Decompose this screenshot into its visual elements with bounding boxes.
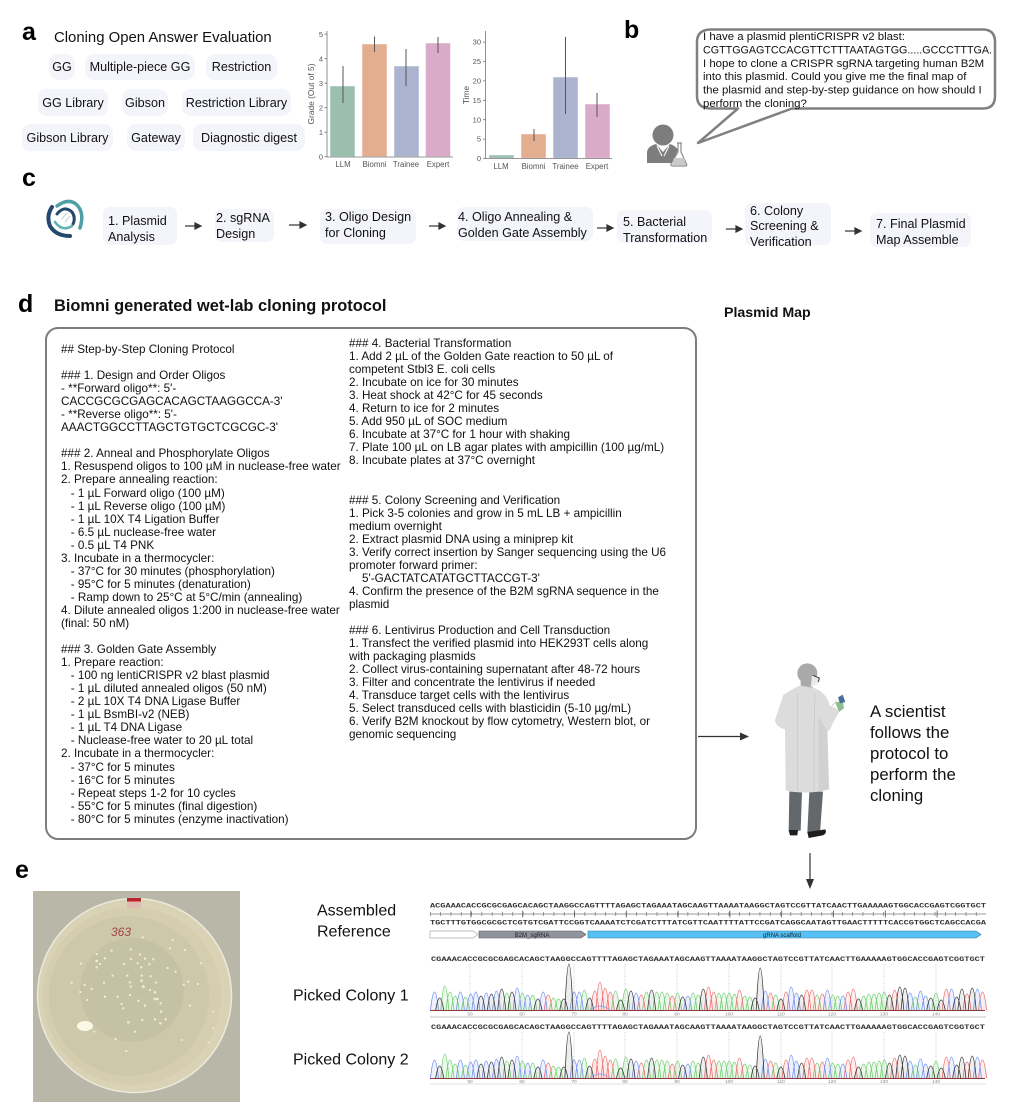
panel label a: a [22, 18, 36, 46]
y ticks: grade: 3 [319, 79, 323, 88]
chromatogram: colony 2: 80 [622, 1079, 628, 1085]
chromatogram: colony 1: 100 [725, 1012, 733, 1018]
chromatogram: colony 2: CGAAACACCGCGCGAGCACAGCTAAGGCCAGTTTTAGAGCTAGAAATAGCAAGTTAAAATAAGGCTAGTCCGTTATCAACTTGAAAAAGTGGCACCGAGTCGGTGCT [431, 1024, 985, 1031]
glasses [813, 675, 819, 682]
chromatogram: colony 1: 120 [828, 1012, 836, 1018]
heading: protocol title: Biomni generated wet-lab cloning protocol [54, 297, 386, 315]
axes: time [483, 31, 612, 158]
chromatogram: colony 2: 130 [880, 1079, 888, 1085]
tag diagnostic digest: Diagnostic digest [201, 130, 297, 144]
face mask [811, 675, 819, 687]
y ticks: grade: 4 [319, 54, 323, 64]
chromatogram: colony 2: 100 [725, 1079, 733, 1085]
y ticks: time [473, 38, 481, 163]
panel d: protocol box [45, 327, 697, 840]
assembled reference track [430, 902, 986, 939]
chromatogram: colony 1: 110 [777, 1012, 785, 1018]
icon: biomni logo [48, 201, 82, 236]
panel label c: c [22, 164, 36, 192]
y ticks: time: 25 [473, 57, 481, 66]
assembled reference track: B2M_sgRNA [515, 933, 549, 939]
y ticks: time: 20 [473, 76, 481, 86]
chromatogram: colony 2: 140 [932, 1079, 940, 1085]
tag GG library: GG Library [42, 96, 104, 110]
chromatogram: colony 2 [430, 1024, 986, 1085]
head [797, 663, 817, 683]
tag Gibson [122, 89, 168, 116]
panel a: cloning task categories [22, 30, 305, 151]
chromatogram: colony 1 [430, 956, 986, 1018]
tag restriction library [182, 89, 291, 116]
bubble outline [697, 30, 995, 143]
red mark [127, 898, 141, 902]
glare [77, 1021, 93, 1031]
labels: sequencing rows: Picked Colony 2 [293, 1052, 409, 1068]
bars: grade [330, 43, 450, 157]
bubble text: the plasmid and step-by-step guidance on how should I [703, 84, 982, 96]
dish rim [38, 898, 232, 1092]
chromatogram: colony 1: 60 [519, 1012, 525, 1018]
tag restriction [206, 54, 277, 80]
glove [835, 701, 844, 712]
speech bubble [697, 30, 995, 143]
lab coat [775, 685, 839, 793]
step 7: 7. Final Plasmid Map Assemble [876, 217, 966, 247]
arrow: scientist to sequencing [806, 853, 814, 889]
arrows: workflow [185, 222, 861, 234]
tag Gibson: Gibson [125, 96, 165, 110]
x labels: time [493, 162, 609, 171]
chart: time by group [461, 31, 612, 171]
panel label b: b [624, 16, 639, 44]
bubble text: I hope to clone a CRISPR sgRNA targeting human B2M [703, 58, 984, 70]
top strand: ACGAAACACCGCGCGAGCACAGCTAAGGCCAGTTTTAGAGCTAGAAATAGCAAGTTAAAATAAGGCTAGTCCGTTATCAACTTGAAAAAGTGGCACCGAGTCGGTGCT [430, 902, 986, 910]
handwritten label: 363 [111, 925, 131, 939]
bars: time [489, 77, 610, 158]
illustration: scientist [775, 663, 845, 838]
tag multiple-piece GG [85, 54, 195, 80]
y ticks: grade: 0 [319, 152, 323, 162]
tag GG [49, 54, 75, 80]
icon: researcher with flask [647, 124, 687, 166]
chromatogram: colony 2: 50 [467, 1079, 473, 1085]
labels: sequencing rows: Reference [317, 924, 391, 940]
chromatogram: colony 2: 70 [571, 1079, 577, 1085]
labels: sequencing rows: Picked Colony 1 [293, 988, 409, 1004]
y ticks: time: 5 [477, 135, 481, 144]
bubble text: into this plasmid. Could you give me the final map of [703, 71, 967, 83]
x labels: grade: Expert [427, 160, 450, 169]
step 2: 2. sgRNA Design [216, 211, 270, 241]
colonies [70, 936, 214, 1052]
tag Gateway: Gateway [131, 130, 181, 144]
chromatogram: colony 1: 80 [622, 1012, 628, 1018]
y axis title: grade: Grade (Out of 5) [306, 63, 316, 124]
x labels: grade [335, 160, 450, 169]
error bars: grade [343, 36, 438, 103]
trousers [789, 792, 823, 833]
chromatogram: colony 1: 90 [674, 1012, 680, 1018]
step 6: 6. Colony Screening & Verification [750, 204, 819, 249]
tag Gibson library [22, 124, 113, 151]
bubble text: CGTTGGAGTCCACGTTCTTTAATAGTGG.....GCCCTTTGA. [703, 44, 992, 56]
panel label d: d [18, 290, 33, 318]
chromatogram: colony 1: 70 [571, 1012, 577, 1018]
y ticks: time: 15 [473, 96, 481, 105]
step 4: 4. Oligo Annealing & Golden Gate Assembly [458, 210, 587, 240]
x labels: time: Biomni [522, 162, 546, 171]
shoes [789, 829, 826, 838]
x labels: grade: Biomni [363, 160, 387, 169]
annotation arrow: gRNA scaffold [588, 931, 981, 938]
x labels: time: LLM [493, 162, 509, 171]
protocol column 2: ### 4. Bacterial Transformation 1. Add 2 µL of the Golden Gate reaction to 50 µL of competent Stbl3 E. coli cells 2. Incubate on ice for 30 minutes 3. Heat shock at 42°C for 45 seconds 4. Return to ice for 2 minutes 5. Add 950 µL of SOC medium 6. Incubate at 37°C for 1 hour with shaking 7. Plate 100 µL on LB agar plates with ampicillin (100 µg/mL) 8. Incubate plates at 37°C overnight ### 5. Colony Screening and Verification 1. Pick 3-5 colonies and grow in 5 mL LB + ampicillin medium overnight 2. Extract plasmid DNA using a miniprep kit 3. Verify correct insertion by Sanger sequencing using the U6 promoter forward primer: 5'-GACTATCATATGCTTACCGT-3' 4. Confirm the presence of the B2M sgRNA sequence in the plasmid ### 6. Lentivirus Production and Cell Transduction 1. Transfect the verified plasmid into HEK293T cells along with packaging plasmids 2. Collect virus-containing supernatant after 48-72 hours 3. Filter and concentrate the lentivirus if needed 4. Transduce target cells with the lentivirus 5. Select transduced cells with blasticidin (5-10 µg/mL) 6. Verify B2M knockout by flow cytometry, Western blot, or genomic sequencing [349, 337, 666, 741]
chromatogram: colony 1: 130 [880, 1012, 888, 1018]
tag restriction library: Restriction Library [186, 96, 287, 110]
tag multiple-piece GG: Multiple-piece GG [90, 60, 190, 74]
chromatogram: colony 1: 50 [467, 1012, 473, 1018]
chromatogram: colony 1: CGAAACACCGCGCGAGCACAGCTAAGGCCAGTTTTAGAGCTAGAAATAGCAAGTTAAAATAAGGCTAGTCCGTTATCAACTTGAAAAAGTGGCACCGAGTCGGTGCT [431, 956, 985, 963]
y ticks: grade [319, 30, 323, 162]
ruler [430, 913, 986, 915]
text: scientist follows protocol: A scientist follows the protocol to perform the cloning [870, 702, 956, 805]
y ticks: time: 0 [477, 154, 481, 163]
annotation arrow: vector [430, 931, 478, 938]
tag diagnostic digest [193, 124, 305, 151]
tag Gateway [127, 124, 185, 151]
chart: grade by group [306, 30, 453, 169]
heading: cloning open answer evaluation: Cloning Open Answer Evaluation [54, 30, 272, 46]
x labels: time: Expert [586, 162, 609, 171]
arrow: protocol to scientist [698, 732, 749, 740]
labels: sequencing rows: Assembled [317, 902, 396, 920]
bottle [838, 695, 845, 703]
chromatogram: colony 2: 90 [674, 1079, 680, 1085]
chromatogram: colony 2: 120 [828, 1079, 836, 1085]
x labels: time: Trainee [552, 162, 579, 171]
pipette [830, 701, 837, 708]
bubble text: perform the cloning? [703, 98, 807, 110]
annotation arrow: B2M sgRNA [479, 931, 586, 938]
x labels: grade: Trainee [393, 160, 419, 169]
labels: sequencing rows [293, 902, 409, 1068]
y ticks: grade: 1 [319, 128, 323, 137]
chromatogram: colony 2: 60 [519, 1079, 525, 1085]
panel label e: e [15, 856, 29, 884]
y ticks: grade: 5 [319, 30, 323, 39]
y ticks: grade: 2 [319, 104, 323, 112]
panel c: workflow steps [103, 203, 971, 249]
step 1: 1. Plasmid Analysis [108, 214, 167, 244]
y ticks: time: 30 [473, 38, 481, 47]
axes: grade [324, 31, 453, 157]
bottom strand: TGCTTTGTGGCGCGCTCGTGTCGATTCCGGTCAAAATCTCGATCTTTATCGTTCAATTTTATTCCGATCAGGCAATAGTTGAACTTTTTCACCGTGGCTCAGCCACGA [430, 920, 986, 926]
x labels: grade: LLM [335, 160, 351, 169]
bubble text: I have a plasmid plentiCRISPR v2 blast: [703, 31, 905, 43]
bubble text [703, 31, 992, 110]
y ticks: time: 10 [473, 115, 481, 124]
chromatogram: colony 2: 110 [777, 1079, 785, 1085]
assembled reference track: gRNA scaffold [763, 933, 801, 939]
heading: plasmid map: Plasmid Map [724, 305, 811, 321]
y axis title: time: Time [461, 86, 471, 104]
step 5: 5. Bacterial Transformation [623, 215, 707, 245]
chromatogram: colony 1: 140 [932, 1012, 940, 1018]
protocol column 1: ## Step-by-Step Cloning Protocol ### 1. Design and Order Oligos - **Forward oligo**: 5'- CACCGCGCGAGCACAGCTAAGGCCA-3' - **Reverse oligo**: 5'- AAACTGGCCTTAGCTGTGCTCGCGC-3' ### 2. Anneal and Phosphorylate Oligos 1. Resuspend oligos to 100 µM in nuclease-free water 2. Prepare annealing reaction: - 1 µL Forward oligo (100 µM) - 1 µL Reverse oligo (100 µM) - 1 µL 10X T4 Ligation Buffer - 6.5 µL nuclease-free water - 0.5 µL T4 PNK 3. Incubate in a thermocycler: - 37°C for 30 minutes (phosphorylation) - 95°C for 5 minutes (denaturation) - Ramp down to 25°C at 5°C/min (annealing) 4. Dilute annealed oligos 1:200 in nuclease-free water (final: 50 nM) ### 3. Golden Gate Assembly 1. Prepare reaction: - 100 ng lentiCRISPR v2 blast plasmid - 1 µL diluted annealed oligos (50 nM) - 2 µL 10X T4 DNA Ligase Buffer - 1 µL BsmBI-v2 (NEB) - 1 µL T4 DNA Ligase - Nuclease-free water to 20 µL total 2. Incubate in a thermocycler: - 37°C for 5 minutes - 16°C for 5 minutes - Repeat steps 1-2 for 10 cycles - 55°C for 5 minutes (final digestion) - 80°C for 5 minutes (enzyme inactivation) [61, 343, 341, 826]
agar [49, 916, 209, 1076]
neck [801, 678, 813, 688]
photo: petri dish with colonies [33, 891, 240, 1102]
error bars: time [534, 37, 597, 141]
tag Gibson library: Gibson Library [27, 130, 108, 144]
tag GG library [38, 89, 108, 116]
step 1 [103, 207, 177, 245]
tag restriction: Restriction [212, 60, 271, 74]
tag GG: GG [52, 60, 72, 74]
step 3: 3. Oligo Design for Cloning [325, 210, 411, 240]
